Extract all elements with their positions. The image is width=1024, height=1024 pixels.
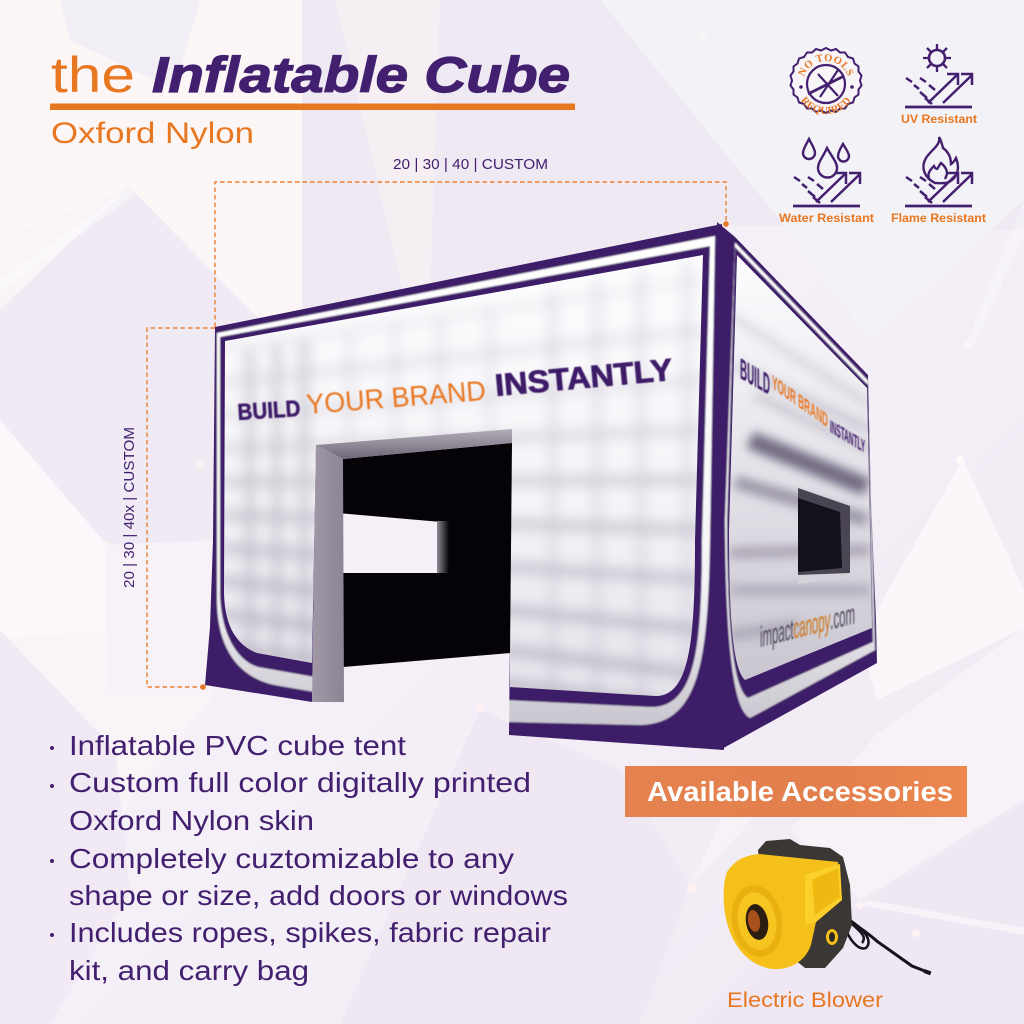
height dimension label: 20 | 30 | 40x | CUSTOM bbox=[122, 427, 138, 588]
width dimension line bbox=[215, 182, 726, 327]
accessories banner: Available Accessories bbox=[647, 776, 953, 807]
label: flame resistant: Flame Resistant bbox=[891, 213, 986, 225]
width dimension label: 20 | 30 | 40 | CUSTOM bbox=[393, 157, 548, 173]
height dimension line bbox=[147, 221, 729, 690]
title bbox=[51, 47, 570, 103]
tent: front slogan: INSTANTLY bbox=[493, 352, 674, 403]
blower caption: Electric Blower bbox=[727, 989, 883, 1012]
icon: no tools required badge: REQUIRED bbox=[800, 96, 850, 115]
tent: front wall bbox=[195, 215, 735, 755]
tent: door opening bbox=[312, 429, 512, 702]
tent: right side wall bbox=[717, 222, 877, 750]
bullet list: Oxford Nylon skin bbox=[69, 805, 314, 836]
tent: front slogan: YOUR BRAND bbox=[305, 375, 487, 420]
bullet list: Completely cuztomizable to any bbox=[69, 843, 514, 874]
tent: front slogan bbox=[237, 352, 674, 425]
title rule bbox=[50, 104, 575, 110]
bullet list: Includes ropes, spikes, fabric repair bbox=[69, 917, 551, 948]
bullet list: Custom full color digitally printed bbox=[69, 767, 531, 798]
tent: side slogan: YOUR BRAND bbox=[772, 372, 828, 433]
bullet list: Inflatable PVC cube tent bbox=[69, 730, 406, 761]
subtitle: Oxford Nylon bbox=[51, 117, 254, 150]
inflatable cube tent bbox=[195, 215, 885, 755]
title: Inflatable Cube bbox=[152, 47, 570, 103]
label: uv resistant: UV Resistant bbox=[901, 114, 977, 126]
icon: no tools required badge: NO TOOLS bbox=[798, 54, 854, 77]
icon: no tools required badge bbox=[789, 46, 863, 115]
bullet list: kit, and carry bag bbox=[69, 955, 309, 986]
label: water resistant: Water Resistant bbox=[779, 213, 874, 225]
accessories banner bbox=[625, 766, 967, 817]
tent: side slogan bbox=[740, 352, 865, 457]
tent: side window bbox=[798, 488, 850, 584]
tent: side slogan: BUILD bbox=[740, 352, 770, 403]
electric blower bbox=[724, 839, 931, 975]
icon: uv resistant bbox=[905, 44, 972, 107]
icon: flame resistant bbox=[905, 137, 972, 206]
title: the bbox=[51, 47, 135, 103]
tent: right side wall: INSTANTLY bbox=[830, 416, 865, 457]
tent: side website: impactcanopy.com bbox=[760, 599, 855, 654]
tent: front slogan: BUILD bbox=[237, 395, 301, 425]
icon: water resistant bbox=[793, 139, 860, 206]
bullet list: shape or size, add doors or windows bbox=[69, 880, 568, 911]
bullet list bbox=[50, 730, 568, 986]
